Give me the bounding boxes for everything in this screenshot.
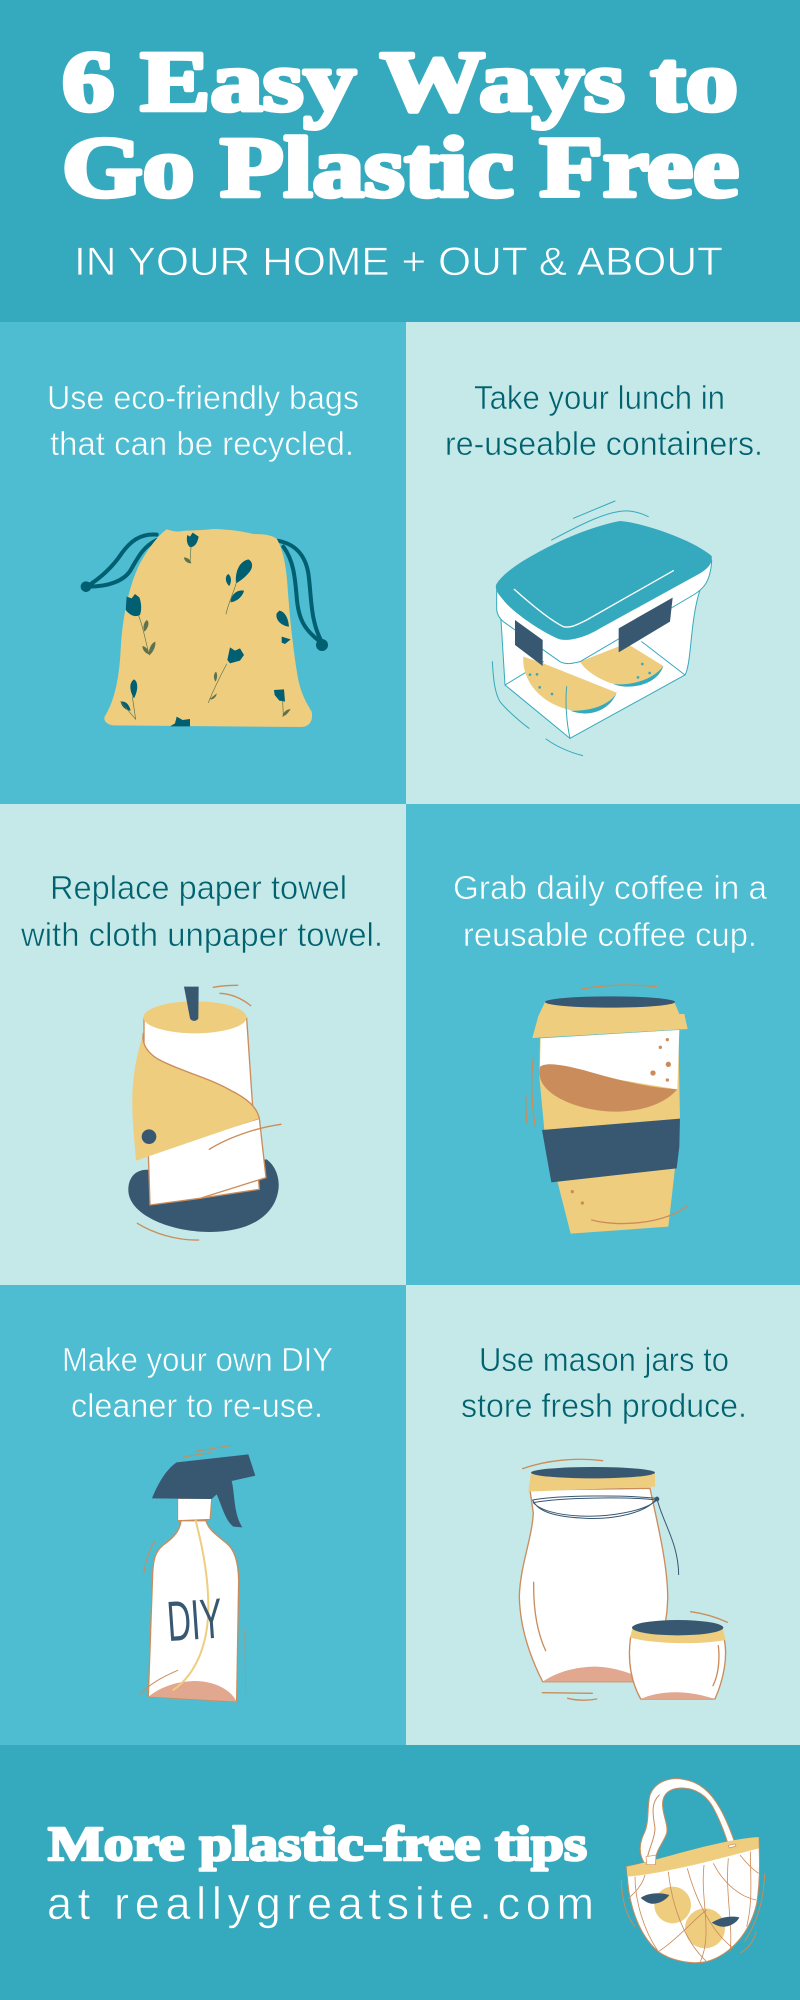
text: eco-friendly bags bbox=[47, 379, 359, 462]
icon: mason jars bbox=[519, 1459, 727, 1700]
icon: lunch box bbox=[492, 501, 712, 756]
icon: spray bottle: DIY bbox=[165, 1587, 224, 1654]
text: DIY cleaner: Make your own DIY bbox=[62, 1341, 333, 1378]
panel: footer bbox=[0, 1745, 800, 2000]
text: mason jars bbox=[461, 1341, 747, 1424]
title bbox=[62, 33, 739, 215]
subtitle: IN YOUR HOME + OUT & ABOUT bbox=[74, 240, 723, 284]
text: mason jars: Use mason jars to bbox=[479, 1341, 729, 1378]
icon: drawstring bag bbox=[81, 529, 328, 727]
panel: unpaper towel bbox=[0, 804, 406, 1285]
text: DIY cleaner: cleaner to re-use. bbox=[71, 1387, 323, 1424]
call to action: More plastic-free tips bbox=[48, 1816, 587, 1871]
icon: towel roll bbox=[128, 985, 281, 1240]
text: unpaper towel: Replace paper towel bbox=[50, 869, 347, 906]
icon: spray bottle bbox=[139, 1445, 255, 1702]
text: lunch containers: Take your lunch in bbox=[474, 379, 725, 416]
panel: header bbox=[0, 0, 800, 322]
text: eco-friendly bags: Use eco-friendly bags bbox=[47, 379, 359, 416]
text: unpaper towel bbox=[20, 869, 383, 953]
icon: mesh tote bag bbox=[621, 1779, 765, 1963]
panel: lunch containers bbox=[406, 322, 800, 804]
text: coffee cup: reusable coffee cup. bbox=[463, 916, 757, 953]
text: unpaper towel: with cloth unpaper towel. bbox=[20, 916, 383, 953]
text: coffee cup: Grab daily coffee in a bbox=[453, 869, 768, 906]
text: lunch containers bbox=[445, 379, 763, 462]
panel: mason jars bbox=[406, 1285, 800, 1745]
text: coffee cup bbox=[453, 869, 768, 953]
call to action: at reallygreatsite.com bbox=[47, 1878, 594, 1929]
call to action bbox=[47, 1816, 594, 1929]
icon: reusable coffee cup bbox=[526, 985, 688, 1234]
text: mason jars: store fresh produce. bbox=[461, 1387, 747, 1424]
title: 6 Easy Ways to bbox=[62, 33, 738, 129]
panel: eco-friendly bags bbox=[0, 322, 406, 804]
panel: DIY cleaner bbox=[0, 1285, 406, 1745]
panel: coffee cup bbox=[406, 804, 800, 1285]
text: eco-friendly bags: that can be recycled. bbox=[50, 425, 354, 462]
text: DIY cleaner bbox=[62, 1341, 333, 1424]
title: Go Plastic Free bbox=[62, 119, 739, 215]
text: lunch containers: re-useable containers. bbox=[445, 425, 763, 462]
